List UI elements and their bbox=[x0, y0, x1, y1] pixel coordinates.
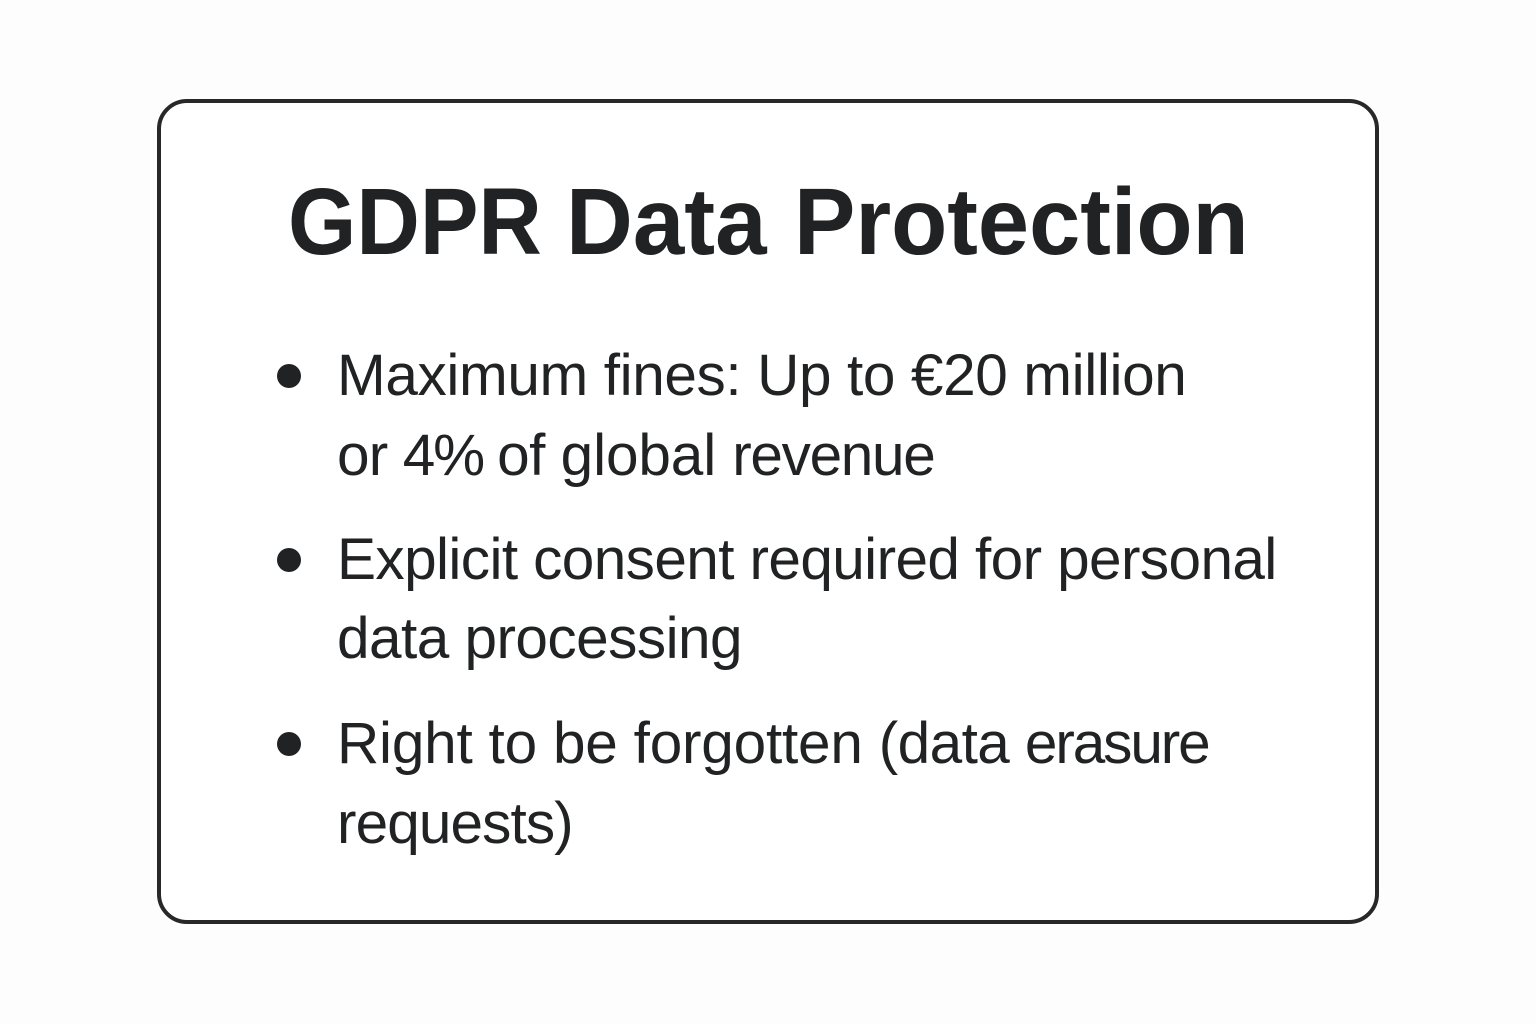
title: Protection bbox=[794, 169, 1249, 275]
text block: explicit consent: data processing bbox=[337, 606, 742, 671]
title: Data bbox=[566, 169, 767, 275]
text block: right to be forgotten: Right to be forgotten (data erasure bbox=[337, 711, 1209, 776]
bullet icon: erasure bbox=[277, 732, 301, 756]
bullet icon: consent bbox=[277, 548, 301, 572]
bullet icon: fines bbox=[277, 364, 301, 388]
title bbox=[288, 169, 1249, 275]
text block: maximum fines bbox=[337, 343, 1186, 488]
text block: maximum fines: or 4% of global revenue bbox=[337, 423, 935, 488]
panel: GDPR card bbox=[157, 99, 1379, 924]
text block: explicit consent: Explicit consent required for personal bbox=[337, 527, 1277, 592]
text block: right to be forgotten bbox=[337, 711, 1209, 856]
title: GDPR bbox=[288, 169, 542, 275]
text block: explicit consent bbox=[337, 527, 1277, 671]
text block: right to be forgotten: requests) bbox=[337, 791, 573, 856]
text block: maximum fines: Maximum fines: Up to €20 million bbox=[337, 343, 1186, 408]
